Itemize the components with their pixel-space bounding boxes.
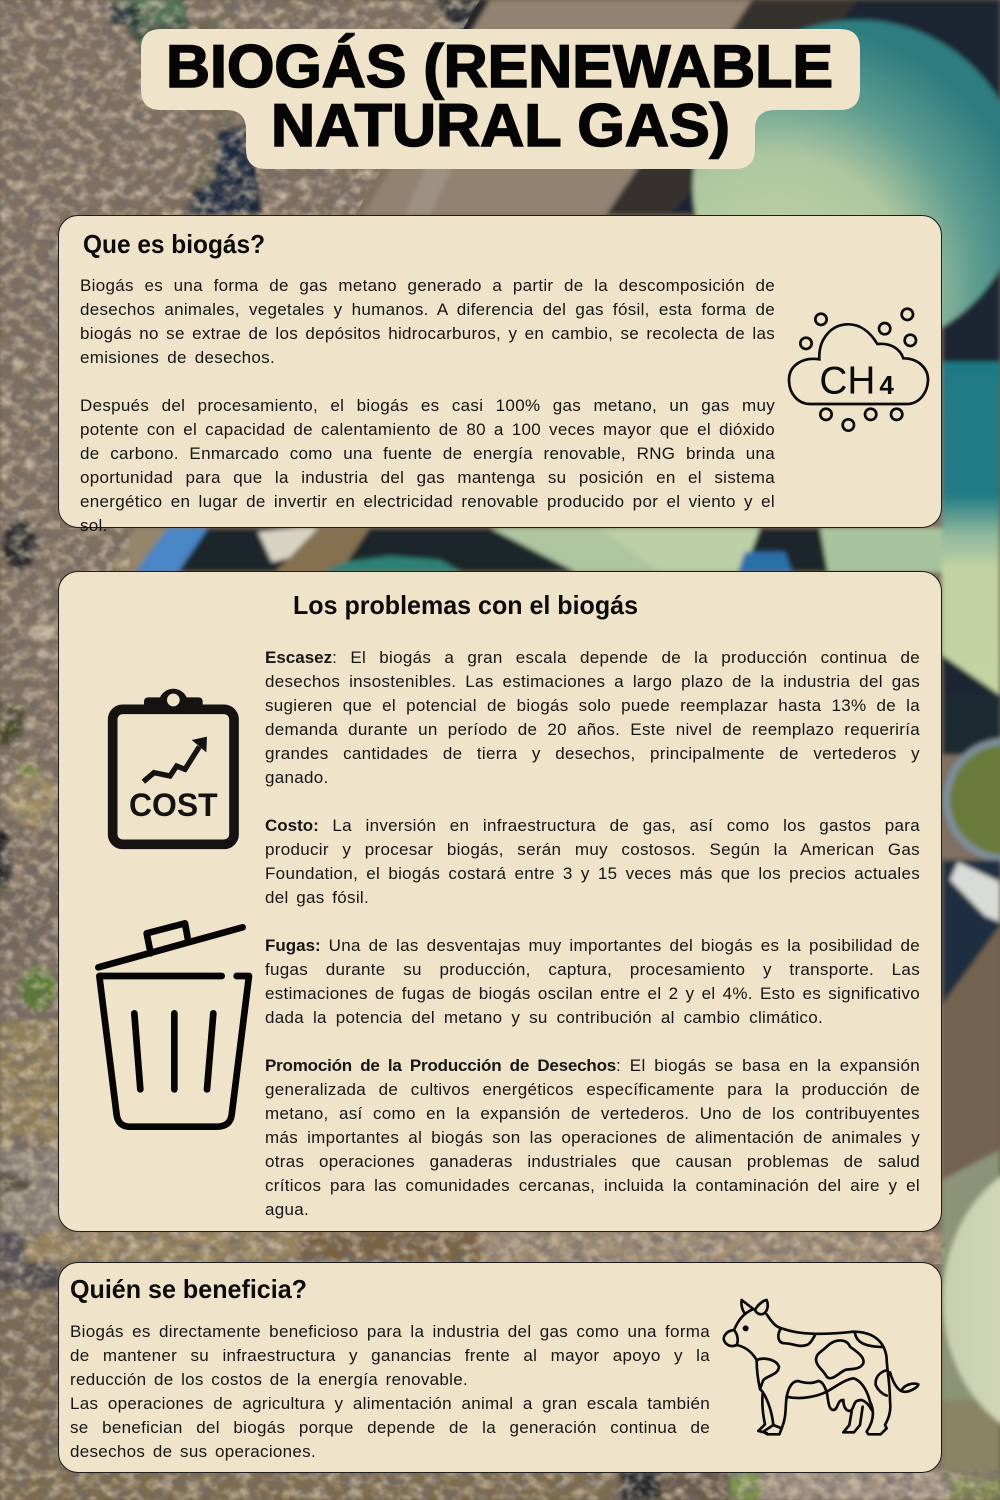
title text: BIOGÁS (RENEWABLE [166,33,833,100]
title text: NATURAL GAS) [271,92,730,159]
text block: definition [80,276,775,535]
panel: que es biogas [58,215,942,528]
blue stripes and truck [135,528,208,572]
bottom band [0,1470,620,1500]
top-left greens and water [110,0,190,50]
text block: problems: grandes cantidades de tierra y desechos, principalmente de vertederos y [265,744,920,763]
big tank [693,20,1000,350]
panel: los problemas [58,571,942,1232]
second right tank [942,362,1000,695]
text block: problems: Costo: La inversión en infraestructura de gas, así como los gastos para [265,816,920,835]
text block: problems: ganado. [265,768,329,787]
text block: problems: Foundation, el biogás costará entre 3 y 15 veces más que los precios actuales [265,864,920,883]
text block: problems: del gas fósil. [265,888,369,907]
lower right [942,695,1000,755]
text block: problems [265,648,920,1219]
text block: beneficiaries: Biogás es directamente beneficioso para la industria del gas como una forma [70,1322,710,1341]
text block: problems: dada la potencia del metano y su contribución al cambio climático. [265,1008,823,1027]
text block: definition: de carbono. Enmarcado como una fuente de energía renovable, RNG brinda una [80,444,775,463]
text block: problems: más importantes al biogás son las operaciones de alimentación de animales y [265,1128,920,1147]
text block: definition: emisiones de desechos. [80,348,275,367]
text block: problems: críticos para las comunidades cercanas, incluida la contaminación del aire y el [265,1176,920,1195]
text block: definition: sol. [80,516,108,535]
icon: cow [722,1298,920,1436]
heading: los problemas: Los problemas con el biogás [293,590,638,620]
text block: beneficiaries: desechos de sus operaciones. [70,1442,316,1461]
text block: problems: otras operaciones ganaderas industriales que causan problemas de salud [265,1152,920,1171]
text block: definition: biogás no se extrae de los depósitos hidrocarburos, y en cambio, se recolecta de las [80,324,775,343]
text block: problems: metano, así como en la expansión de vertederos. Uno de los contribuyentes [265,1104,920,1123]
panel: quien se beneficia [58,1262,942,1473]
text block: problems: generalizada de cultivos energéticos específicamente para la producción de [265,1080,920,1099]
text block: definition: Biogás es una forma de gas metano generado a partir de la descomposición de [80,276,775,295]
icon: methane cloud: 4 [879,370,894,400]
text block: definition: energético en lugar de invertir en electricidad renovable producido por el viento y el [80,492,775,511]
heading: quien se beneficia: Quién se beneficia? [70,1274,307,1304]
text block: problems: desechos insostenibles. Las estimaciones a largo plazo de la industria del gas [265,672,920,691]
icon: cost clipboard: COST [129,786,218,823]
text block: beneficiaries [70,1322,710,1461]
text block: beneficiaries: reducción de los costos de la energía renovable. [70,1370,468,1389]
left strip patches [2,520,38,570]
icon: methane cloud [788,307,930,432]
text block: definition: Después del procesamiento, el biogás es casi 100% gas metano, un gas muy [80,396,775,415]
text block: definition: desechos animales, vegetales y humanos. A diferencia del gas fósil, esta forma de [80,300,775,319]
dark zones around tanks [430,0,1000,720]
text block: problems: producir y procesar biogás, serán muy costosos. Según la American Gas [265,840,920,859]
tanks in band [490,528,760,572]
text block: problems: Fugas: Una de las desventajas muy importantes del biogás es la posibilidad de [265,936,920,955]
text block: problems: estimaciones de fugas de biogás oscilan entre el 2 y el 4%. Esto es significativo [265,984,920,1003]
icon: cost clipboard [108,688,239,850]
text block: problems: sugieren que el potencial de biogás solo puede reemplazar hasta 13% de la [265,696,920,715]
text block: problems: Promoción de la Producción de Desechos: El biogás se basa en la expansión [265,1056,920,1075]
text block: definition: potente con el capacidad de calentamiento de 80 a 100 veces mayor que el dióxido [80,420,775,439]
text block: definition: oportunidad para que la industria del gas mantenga su posición en el sistema [80,468,775,487]
title banner [141,29,860,169]
text block: problems: agua. [265,1200,309,1219]
icon: methane cloud: CH [819,358,875,402]
text block: problems: fugas durante su producción, captura, procesamiento y transporte. Las [265,960,920,979]
middle band [0,1232,25,1262]
text block: beneficiaries: Las operaciones de agricultura y alimentación animal a gran escala también [70,1394,710,1413]
banner shape [141,29,860,169]
text block: problems: Escasez: El biogás a gran escala depende de la producción continua de [265,648,920,667]
heading: que es biogas: Que es biogás? [83,229,265,259]
road [363,0,752,215]
text block: beneficiaries: de mantener su infraestructura y ganancias frente al mayor apoyo y la [70,1346,710,1365]
title text [166,33,833,159]
text block: problems: demanda durante un período de 20 años. Este nivel de reemplazo requeriría [265,720,920,739]
icon: trash can [95,920,252,1130]
text block: beneficiaries: se benefician del biogás porque depende de la generación continua de [70,1418,710,1437]
